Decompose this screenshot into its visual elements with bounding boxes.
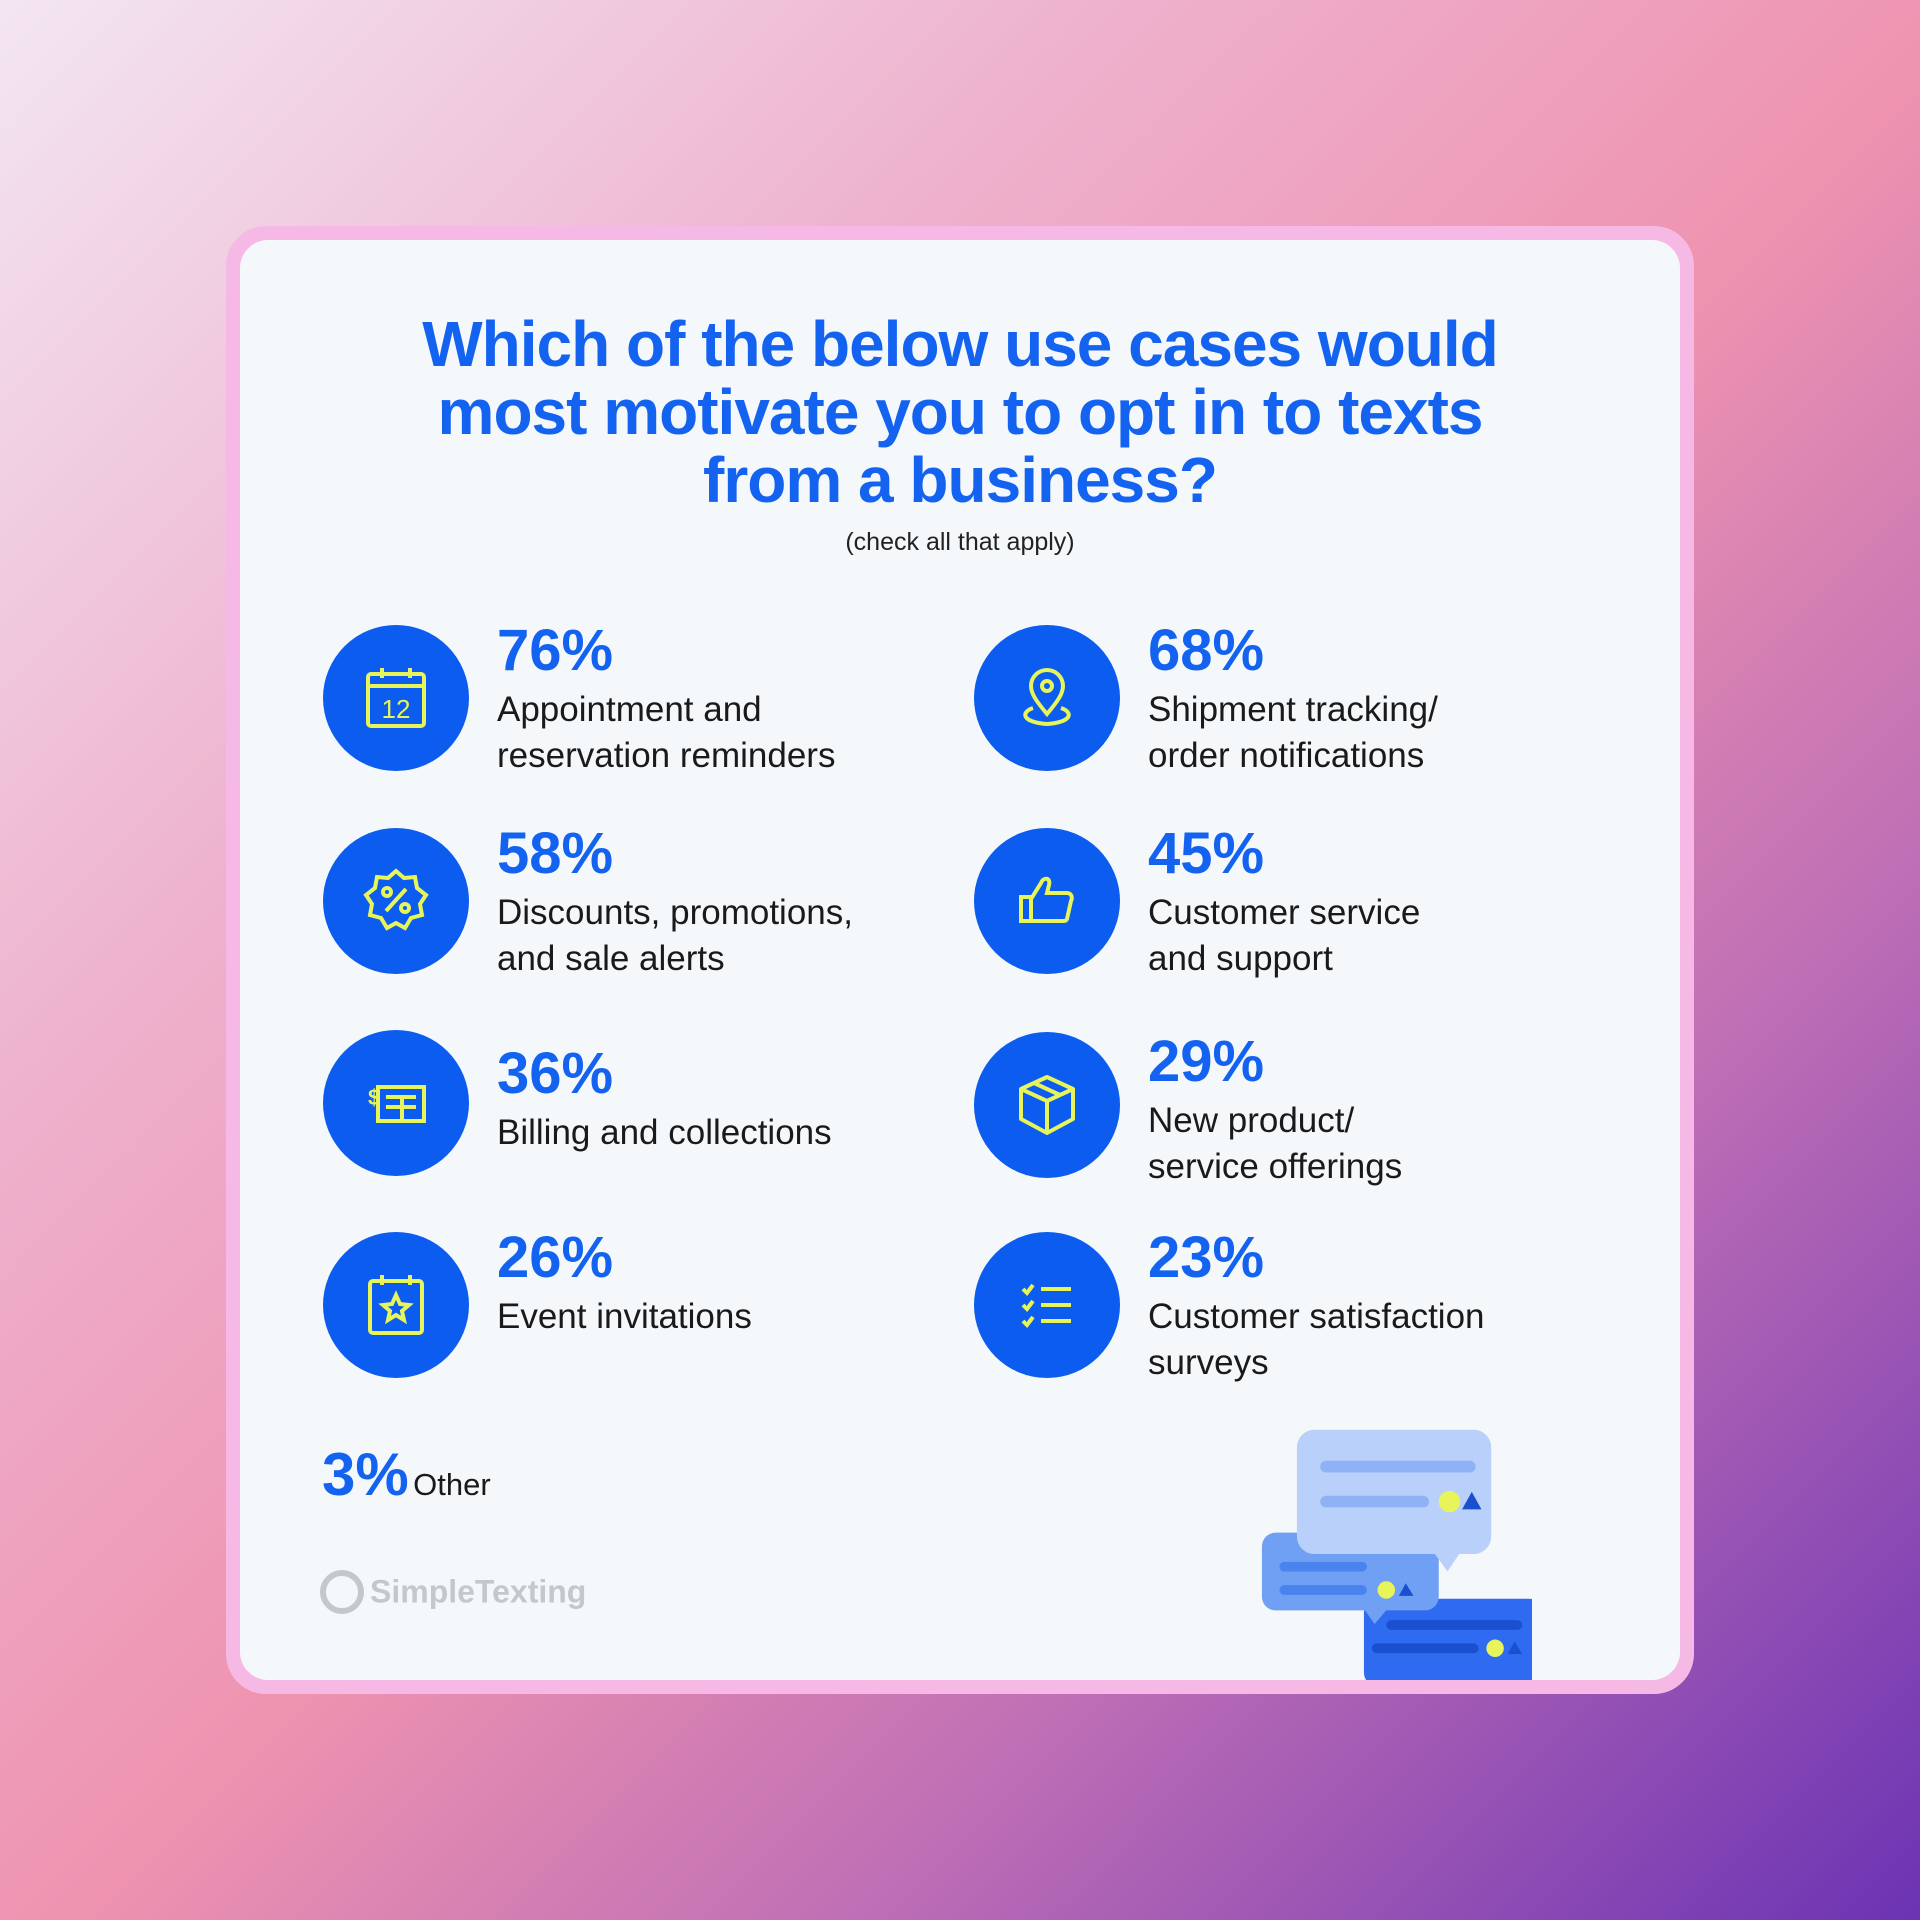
- item: event invitations: 26%: [497, 1225, 613, 1290]
- item: customer service: [974, 821, 1420, 978]
- item: surveys: 23%: [1148, 1225, 1264, 1290]
- icon: star calendar: [323, 1232, 469, 1378]
- item: new product: New product/: [1148, 1101, 1354, 1140]
- title: Which of the below use cases would: [422, 308, 1498, 380]
- item: discounts: Discounts, promotions,: [497, 893, 853, 932]
- item: event invitations: Event invitations: [497, 1297, 752, 1336]
- icon: discount badge: [323, 828, 469, 974]
- item: discounts: [323, 821, 853, 978]
- item: discounts: and sale alerts: [497, 939, 725, 978]
- item: surveys: surveys: [1148, 1343, 1269, 1382]
- icon: bill: $: [368, 1085, 380, 1110]
- icon: bill: [323, 1030, 469, 1176]
- item: appointments: Appointment and: [497, 690, 762, 729]
- item: new product: service offerings: [1148, 1147, 1402, 1186]
- item: customer service: 45%: [1148, 821, 1264, 886]
- card: [226, 226, 1694, 1694]
- title: from a business?: [703, 444, 1217, 516]
- item: shipment: 68%: [1148, 618, 1264, 683]
- item: shipment: order notifications: [1148, 736, 1424, 775]
- item: discounts: 58%: [497, 821, 613, 886]
- item: shipment: [974, 618, 1438, 775]
- item: new product: [974, 1029, 1402, 1186]
- item: new product: 29%: [1148, 1029, 1264, 1094]
- icon: checklist: [974, 1232, 1120, 1378]
- item: appointments: reservation reminders: [497, 736, 835, 775]
- item: customer service: Customer service: [1148, 893, 1420, 932]
- item: event invitations: [323, 1225, 752, 1378]
- item: appointments: [323, 618, 835, 775]
- item: surveys: [974, 1225, 1485, 1382]
- title: [422, 308, 1498, 516]
- item: billing: Billing and collections: [497, 1113, 832, 1152]
- item: shipment: Shipment tracking/: [1148, 690, 1438, 729]
- logo: SimpleTexting: [370, 1574, 586, 1610]
- illustration: chat bubbles: [1262, 1430, 1532, 1680]
- title: most motivate you to opt in to texts: [438, 376, 1482, 448]
- icon: calendar: 12: [382, 694, 410, 724]
- icon: location pin: [974, 625, 1120, 771]
- icon: box: [974, 1032, 1120, 1178]
- item: customer service: and support: [1148, 939, 1333, 978]
- item: billing: 36%: [497, 1041, 613, 1106]
- item: billing: [323, 1030, 832, 1176]
- icon: calendar: [323, 625, 469, 771]
- other: 3% Other: [322, 1441, 491, 1508]
- logo: [320, 1570, 586, 1614]
- subtitle: (check all that apply): [845, 528, 1075, 556]
- icon: thumbs up: [974, 828, 1120, 974]
- item: appointments: 76%: [497, 618, 613, 683]
- item: surveys: Customer satisfaction: [1148, 1297, 1485, 1336]
